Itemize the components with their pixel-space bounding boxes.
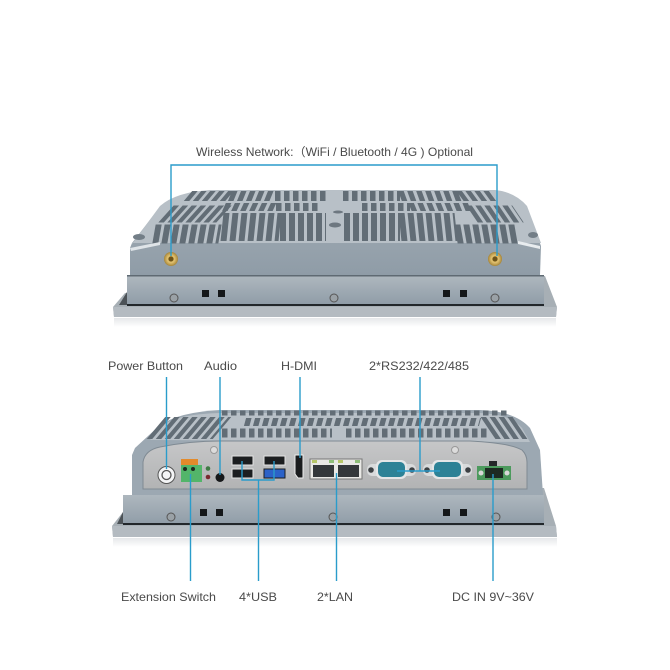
mid chassis — [127, 275, 544, 306]
arrow: HDMI line — [299, 377, 301, 458]
arrow: USB line — [258, 480, 260, 581]
label: DC IN: DC IN 9V~36V — [452, 590, 534, 604]
device: rear view with ports — [112, 410, 557, 547]
status LEDs — [206, 466, 210, 479]
front bezel — [113, 276, 557, 327]
label: USB: 4*USB — [239, 590, 277, 604]
RS232 serial ports — [367, 460, 472, 479]
arrow: extension switch line — [190, 474, 192, 581]
mid chassis — [123, 495, 544, 525]
label: Power Button: Power Button — [108, 359, 183, 373]
wireless callout line — [171, 165, 497, 256]
label: Extension Switch: Extension Switch — [121, 590, 216, 604]
arrow: LAN line — [336, 473, 338, 581]
chassis screws and vents — [170, 290, 499, 302]
power button — [158, 466, 175, 484]
DC power terminal — [477, 461, 511, 480]
brushed metal port plate — [143, 441, 527, 489]
LAN ports — [310, 459, 362, 479]
label: Audio: Audio — [204, 359, 237, 373]
front bezel — [112, 488, 557, 547]
heat sink fins — [150, 413, 530, 442]
left antenna connector — [164, 252, 178, 266]
arrow: DC line — [492, 474, 494, 581]
HDMI port — [295, 455, 303, 478]
arrow: power button line — [166, 377, 168, 469]
label: LAN: 2*LAN — [317, 590, 353, 604]
arrow: RS232 line — [419, 377, 421, 471]
right antenna connector — [488, 252, 502, 266]
heat sink body — [132, 410, 543, 495]
plate screws and chassis vents — [167, 446, 500, 521]
heat sink fins — [130, 190, 541, 251]
label: H-DMI: H-DMI — [281, 359, 317, 373]
arrow: RS232 bridge — [397, 470, 440, 472]
label: RS232: 2*RS232/422/485 — [369, 359, 469, 373]
audio jack — [216, 473, 224, 482]
device: top view with antennas — [113, 190, 557, 327]
USB ports — [232, 456, 285, 478]
extension switch connector — [181, 459, 202, 482]
wireless network heading: Wireless Network:（WiFi / Bluetooth / 4G ) Optional — [196, 145, 473, 159]
arrow: audio line — [219, 377, 221, 475]
heat sink body — [130, 191, 541, 275]
arrow: USB bracket line — [242, 461, 274, 480]
